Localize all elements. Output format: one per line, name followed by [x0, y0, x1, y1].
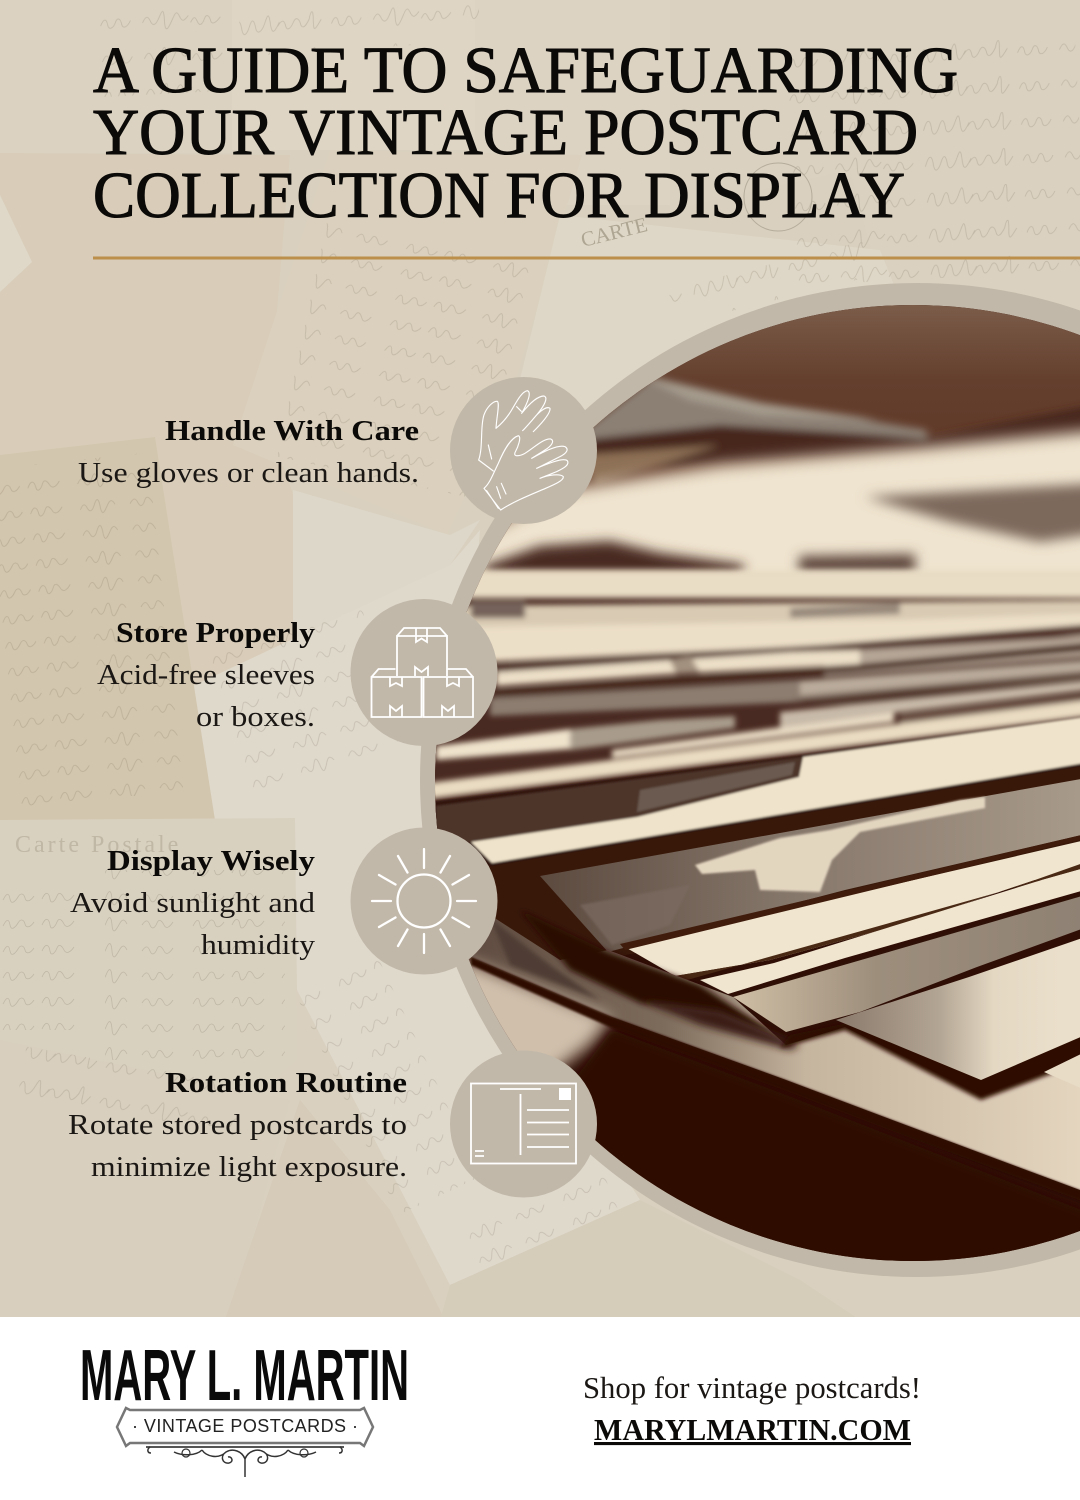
- step 3 text: Display Wisely: [107, 845, 316, 877]
- call to action: Shop for vintage postcards!: [583, 1370, 921, 1405]
- title: YOUR VINTAGE POSTCARD: [93, 96, 918, 169]
- step 3 text: Avoid sunlight and: [70, 887, 316, 919]
- footer band: [0, 1317, 1080, 1500]
- step 1 text: [78, 415, 419, 489]
- step 3: display wisely: [350, 828, 498, 974]
- ring around the photo: [420, 283, 1080, 1277]
- title: COLLECTION FOR DISPLAY: [93, 159, 905, 232]
- icon: gloves: [479, 391, 568, 510]
- step 4 text: minimize light exposure.: [91, 1151, 407, 1183]
- step 4 text: [68, 1067, 407, 1183]
- step 1 text: Handle With Care: [165, 415, 419, 447]
- icon: postcard back: [471, 1084, 576, 1164]
- step 2 text: or boxes.: [196, 701, 315, 733]
- logo: Mary L. Martin Vintage Postcards: MARY L. MARTIN: [80, 1336, 409, 1416]
- step 1 text: Use gloves or clean hands.: [78, 457, 419, 489]
- step 2 text: Acid-free sleeves: [97, 659, 315, 691]
- step 3 text: humidity: [201, 929, 316, 961]
- icon: sun: [372, 849, 476, 953]
- step 1: handle with care: [450, 377, 597, 524]
- background: collage of vintage postcards: CARTE: [578, 212, 650, 252]
- step 4: rotation routine: [450, 1050, 597, 1198]
- call to action: [583, 1370, 921, 1447]
- step 2 text: Store Properly: [116, 617, 316, 649]
- background: collage of vintage postcards: Carte Postale: [15, 832, 181, 858]
- step 2: store properly: [350, 599, 498, 746]
- step 4 text: Rotate stored postcards to: [68, 1109, 407, 1141]
- logo: Mary L. Martin Vintage Postcards: · VINTAGE POSTCARDS ·: [132, 1416, 358, 1436]
- title: A GUIDE TO SAFEGUARDING: [93, 34, 958, 107]
- step 2 text: [97, 617, 316, 733]
- step 3 text: [70, 845, 316, 961]
- icon: stacked boxes: [372, 628, 473, 717]
- call to action: MARYLMARTIN.COM: [594, 1412, 911, 1447]
- title: [93, 34, 958, 232]
- step 4 text: Rotation Routine: [165, 1067, 407, 1099]
- logo: Mary L. Martin Vintage Postcards: [80, 1336, 409, 1477]
- photo: stack of vintage postcards: [420, 290, 1080, 1290]
